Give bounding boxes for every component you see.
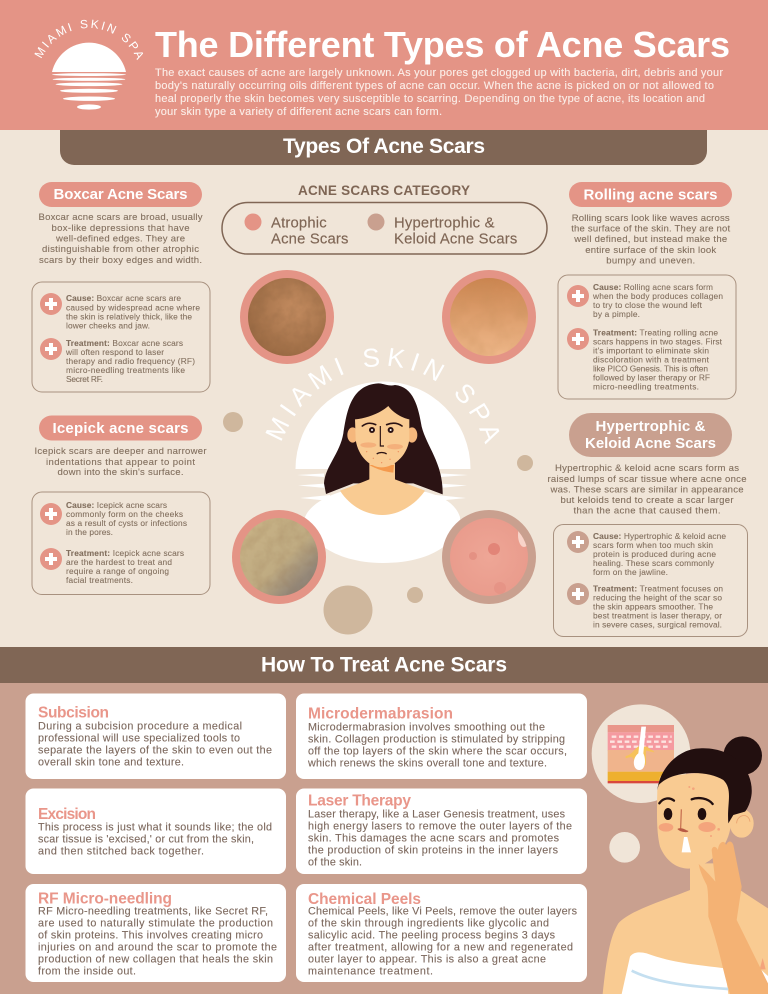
laser therapy text: the production of skin proteins in the inner layers (308, 844, 559, 856)
icepick cause and treatment box (32, 492, 210, 594)
laser therapy text: Laser therapy, like a Laser Genesis treatment, uses (308, 808, 566, 820)
card: excision (26, 788, 286, 874)
rolling cause text: to try to close the wound left (593, 300, 703, 310)
icon: plus (567, 285, 589, 307)
rolling description (571, 213, 731, 266)
chemical peels text: maintenance treatment. (308, 966, 433, 978)
hypertrophic description: raised lumps of scar tissue where acne once (548, 474, 746, 485)
excision text: This process is just what it sounds like; the old (38, 822, 272, 834)
hypertrophic treatment text (593, 584, 723, 630)
icon: plus (567, 531, 589, 553)
boxcar treatment text: therapy and radio frequency (RF) (66, 356, 195, 366)
boxcar cause text: the skin is relatively thick, like the (66, 312, 192, 322)
icepick description: Icepick scars are deeper and narrower (34, 446, 207, 457)
boxcar description: scars by their boxy edges and width. (39, 255, 202, 266)
panel: rolling acne scars (558, 182, 736, 399)
icepick description: down into the skin's surface. (58, 467, 184, 478)
boxcar treatment text: micro-needling treatments like (66, 365, 185, 375)
icepick treatment text: are the hardest to treat and (66, 557, 172, 567)
boxcar description: well-defined edges. They are (55, 234, 185, 244)
laser therapy text (308, 808, 572, 868)
icon: plus (40, 503, 62, 525)
microdermabrasion text (307, 722, 567, 770)
RF micro-needling text: are used to naturally stimulate the production (38, 918, 273, 930)
subcision text: During a subcision procedure a medical (38, 720, 242, 732)
RF micro-needling text: from the inside out. (38, 966, 136, 978)
icepick treatment text: Treatment: Icepick acne scars (66, 548, 184, 558)
rolling cause text: by a pimple. (593, 309, 640, 319)
hypertrophic heading pill (569, 413, 732, 457)
icon: plus (40, 338, 62, 360)
icepick cause text: Cause: Icepick acne scars (66, 500, 167, 510)
icepick description (34, 446, 207, 478)
card: microdermabrasion (296, 694, 587, 779)
boxcar treatment text (65, 338, 195, 384)
rolling cause text: when the body produces collagen (592, 291, 723, 301)
microdermabrasion text: skin. Collagen production is stimulated by stripping (308, 734, 565, 746)
excision text: and then stitched back together. (38, 846, 204, 858)
hypertrophic description: than the acne that caused them. (574, 506, 720, 516)
icepick cause text: as a result of cysts or infections (66, 518, 187, 528)
hypertrophic cause and treatment box (554, 524, 748, 636)
hypertrophic heading pill: Keloid Acne Scars (585, 435, 716, 452)
white sun and shirt (296, 382, 470, 563)
legend item: hypertrophic and keloid (368, 214, 518, 248)
photo: boxcar scars (240, 270, 334, 364)
rolling treatment text: followed by laser therapy or RF (593, 372, 710, 382)
icon: plus (40, 548, 62, 570)
chemical peels text: after treatment, allowing for a new and regenerated (308, 942, 573, 954)
boxcar description: box-like depressions that have (52, 223, 190, 234)
icon: plus (567, 583, 589, 605)
boxcar heading pill (39, 182, 202, 207)
intro paragraph: body's naturally occurring oils different types of acne can occur. When the acne is picked on or not allowed to (155, 80, 714, 92)
character drawing (324, 383, 443, 515)
section heading bar: Types Of Acne Scars: Types Of Acne Scars (283, 135, 485, 158)
RF micro-needling text (38, 906, 277, 978)
excision heading: Excision (38, 806, 96, 823)
logo: Miami Skin Spa sunset: MIAMI SKIN SPA (34, 20, 143, 60)
rolling treatment text: like PICO Genesis. This is often (593, 364, 708, 374)
decorative tan circles (223, 412, 533, 634)
boxcar description (38, 212, 203, 266)
chemical peels text: salicylic acid. The peeling process begins 3 days (308, 930, 556, 942)
rolling description: bumpy and uneven. (606, 256, 695, 266)
rolling treatment text: micro-needling treatments. (593, 382, 699, 392)
excision text (38, 822, 272, 858)
boxcar description: distinguishable from other atrophic (42, 244, 199, 255)
towel (622, 952, 768, 994)
legend heading: ACNE SCARS CATEGORY (298, 183, 470, 198)
laser therapy text: of the skin. (308, 856, 362, 868)
icon: plus (567, 328, 589, 350)
legend item: hypertrophic and keloid: Keloid Acne Scars (394, 232, 518, 248)
boxcar cause text: Cause: Boxcar acne scars are (66, 293, 181, 303)
subcision text: separate the layers of the skin to even out the (38, 744, 272, 756)
legend item: atrophic: Acne Scars (271, 232, 349, 248)
illustration: woman with acne and brand arc (266, 348, 500, 563)
laser therapy text: skin. This damages the acne scars and promotes (308, 832, 560, 844)
boxcar heading pill: Boxcar Acne Scars (54, 186, 188, 203)
microdermabrasion text: Microdermabrasion involves smoothing out the (308, 722, 545, 734)
RF micro-needling text: injuries on and around the scar to promote the (38, 942, 277, 954)
boxcar cause and treatment box (32, 282, 210, 392)
section heading bar: Types Of Acne Scars (60, 130, 707, 165)
icepick description: indentations that appear to point (46, 457, 195, 468)
rolling heading pill (569, 182, 732, 207)
rolling heading pill: Rolling acne scars (584, 186, 718, 204)
woman figure (603, 736, 768, 994)
rolling cause text: Cause: Rolling acne scars form (593, 282, 713, 292)
subcision text: overall skin tone and texture. (38, 756, 184, 768)
hypertrophic description: but keloids tend to create a scar larger (560, 495, 734, 506)
RF micro-needling text: of skin proteins. This involves creating micro (38, 930, 263, 942)
chemical peels heading: Chemical Peels (308, 891, 421, 908)
microdermabrasion heading: Microdermabrasion (308, 706, 453, 722)
boxcar treatment text: Treatment: Boxcar acne scars (66, 338, 183, 348)
panel: icepick acne scars (32, 416, 210, 594)
hypertrophic cause text: Cause: Hypertrophic & keloid acne (593, 531, 726, 541)
laser therapy heading: Laser Therapy (308, 792, 411, 810)
microdermabrasion text: off the top layers of the skin where the scar occurs, (308, 746, 567, 758)
logo: Miami Skin Spa sunset (34, 20, 143, 110)
rolling treatment text: scars happens in two stages. First (593, 336, 723, 346)
rolling description: well defined, but instead make the (573, 234, 727, 245)
boxcar treatment text: will often respond to laser (65, 347, 164, 357)
boxcar cause text (66, 293, 200, 330)
rolling treatment text: discoloration with a treatment (593, 354, 710, 364)
photo: icepick scars (232, 510, 326, 604)
hypertrophic cause text: form on the jawline. (593, 567, 668, 577)
hypertrophic treatment text: best treatment is laser therapy, or (593, 610, 722, 620)
hypertrophic description (548, 463, 746, 516)
photo: hypertrophic scars (442, 510, 536, 604)
subcision text: professional will use specialized tools to (38, 732, 240, 744)
rolling description: the surface of the skin. They are not (571, 224, 731, 234)
header banner (0, 0, 768, 130)
rolling treatment text: Treatment: Treating rolling acne (593, 328, 718, 338)
icepick cause text: in the pores. (66, 527, 113, 537)
hypertrophic treatment text: in severe cases, surgical removal. (593, 620, 722, 630)
panel: acne scars category legend (222, 183, 547, 254)
thought bubble with skin cross-section (592, 704, 690, 863)
legend item: hypertrophic and keloid: Hypertrophic & (394, 216, 495, 232)
hypertrophic description: was. These scars are similar in appearance (550, 484, 744, 496)
chemical peels text: of the skin through ingredients like glycolic and (308, 918, 549, 930)
hypertrophic treatment text: Treatment: Treatment focuses on (593, 584, 723, 594)
microdermabrasion text: which renews the skins overall tone and texture. (307, 758, 547, 770)
RF micro-needling heading: RF Micro-needling (38, 890, 172, 908)
card: chemical peels (296, 884, 587, 982)
hypertrophic description: Hypertrophic & keloid acne scars form as (555, 463, 739, 474)
icepick treatment text: require a range of ongoing (66, 566, 169, 576)
brand arc text: MIAMI SKIN SPA (266, 348, 500, 444)
laser therapy text: high energy lasers to remove the outer layers of the (308, 820, 572, 832)
hypertrophic cause text: scars form when too much skin (593, 540, 713, 550)
boxcar treatment text: Secret RF. (66, 374, 103, 384)
boxcar description: Boxcar acne scars are broad, usually (38, 212, 203, 223)
RF micro-needling text: RF Micro-needling treatments, like Secret RF, (38, 906, 268, 918)
icepick cause text: commonly form on the cheeks (66, 509, 183, 519)
hypertrophic heading pill: Hypertrophic & (596, 418, 706, 435)
hypertrophic cause text: healing. These scars commonly (593, 558, 715, 568)
hypertrophic cause text (593, 531, 726, 577)
rolling cause text (592, 282, 723, 319)
hypertrophic treatment text: the skin appears smoother. The (593, 602, 713, 612)
raised hand and arm (699, 841, 768, 994)
intro paragraph: your skin type a variety of different acne scars can form. (155, 106, 442, 118)
illustration: woman treating skin with skin diagram (592, 704, 768, 994)
photo: rolling scars (442, 270, 536, 364)
hypertrophic treatment text: reducing the height of the scar so (593, 592, 722, 602)
chemical peels text: outer layer to appear. This is also a great acne (308, 954, 546, 966)
icepick cause text (66, 500, 187, 537)
hypertrophic cause text: protein is produced during acne (593, 549, 716, 559)
card: laser therapy (296, 788, 587, 874)
section heading bar: How To Treat Acne Scars: How To Treat Acne Scars (261, 654, 507, 676)
icepick heading pill: Icepick acne scars (52, 420, 188, 437)
card: RF micro-needling (26, 884, 286, 982)
boxcar cause text: lower cheeks and jaw. (66, 320, 150, 330)
icon: plus (40, 293, 62, 315)
rolling cause and treatment box (558, 275, 736, 399)
legend outline (222, 202, 547, 254)
RF micro-needling text: production of new collagen that heals the skin (38, 954, 273, 966)
icepick treatment text (66, 548, 184, 585)
icepick treatment text: facial treatments. (66, 575, 133, 585)
intro paragraph: heal properly the skin becomes very susceptible to scarring. Depending on the type of acne, its location and (155, 93, 705, 105)
treatment section background (0, 683, 768, 994)
legend item: atrophic: Atrophic (271, 216, 327, 232)
boxcar cause text: caused by widespread acne where (66, 302, 200, 312)
chemical peels text (308, 906, 578, 978)
panel: boxcar acne scars (32, 182, 210, 392)
intro paragraph (155, 67, 723, 118)
subcision text (38, 720, 272, 768)
section heading bar: How To Treat Acne Scars (0, 647, 768, 683)
subcision heading: Subcision (38, 704, 109, 722)
legend item: atrophic (244, 214, 349, 248)
chemical peels text: Chemical Peels, like Vi Peels, remove the outer layers (308, 906, 578, 918)
icepick heading pill (39, 416, 202, 440)
card: subcision (26, 694, 286, 779)
rolling treatment text: it's important to eliminate skin (593, 346, 709, 356)
intro paragraph: The exact causes of acne are largely unknown. As your pores get clogged up with bacteria, dirt, debris and your (155, 67, 723, 79)
excision text: scar tissue is 'excised,' or cut from the skin, (38, 834, 254, 846)
panel: hypertrophic and keloid acne scars (548, 413, 748, 636)
rolling treatment text (593, 328, 723, 392)
rolling description: entire surface of the skin look (585, 245, 716, 256)
title: The Different Types of Acne Scars (155, 24, 730, 65)
rolling description: Rolling scars look like waves across (572, 213, 730, 224)
